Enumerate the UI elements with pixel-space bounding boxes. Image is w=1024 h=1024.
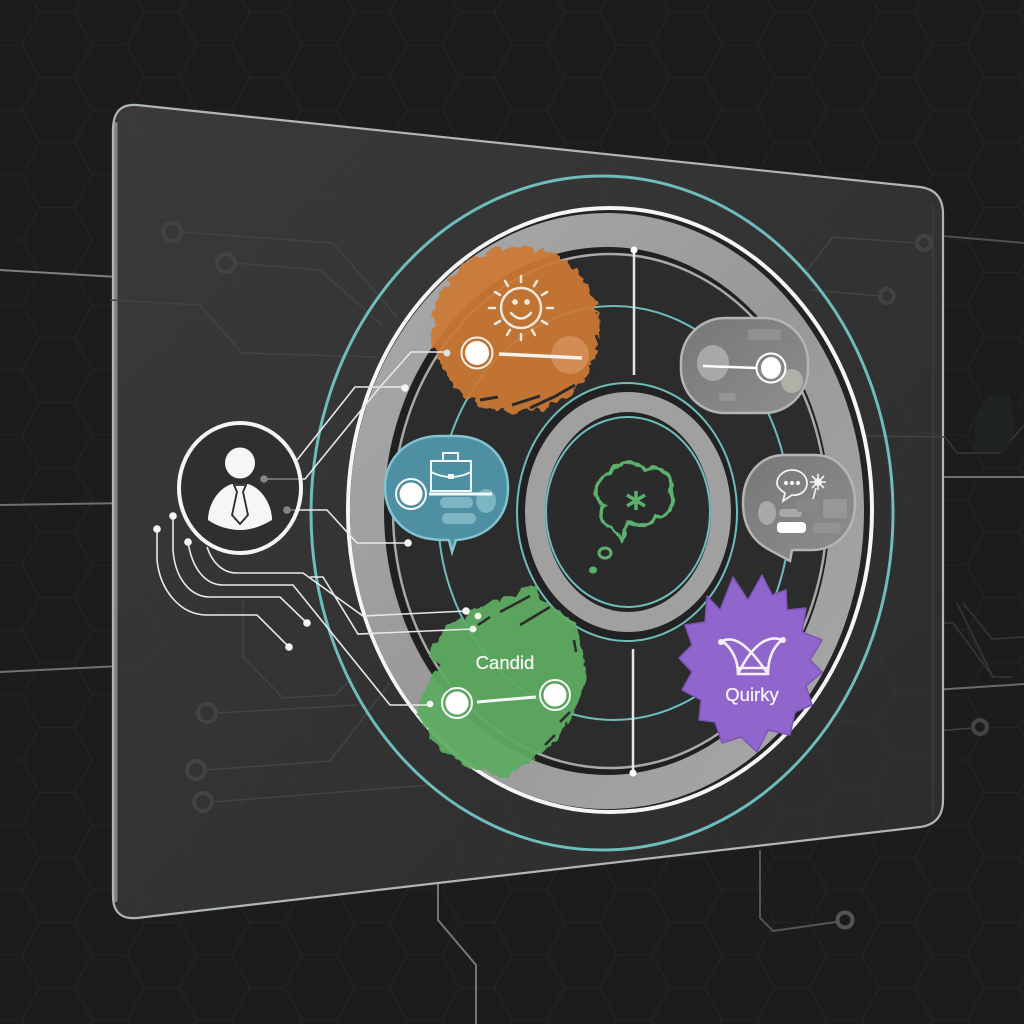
panel: grey chat bubble bbox=[743, 455, 855, 561]
green blob bbox=[417, 584, 585, 778]
panel: orange segment bbox=[432, 246, 600, 412]
bottom spoke bbox=[630, 649, 636, 776]
toggle slider bbox=[703, 354, 786, 382]
icon: jester hat bbox=[718, 637, 786, 674]
background circuit lines bbox=[0, 236, 1024, 1024]
teal middle ring bbox=[438, 306, 790, 720]
hub inner teal ring bbox=[546, 417, 710, 607]
icon: smiling sun bbox=[489, 276, 553, 340]
panel: green Candid segment bbox=[417, 584, 585, 778]
toggle slider bbox=[462, 338, 582, 368]
icon: briefcase bbox=[431, 453, 471, 491]
purple burst bbox=[679, 575, 822, 752]
icon: flower wand bbox=[810, 474, 826, 503]
inner disc bbox=[393, 254, 827, 768]
top spoke bbox=[630, 246, 638, 375]
label: Candid: Candid bbox=[476, 652, 534, 673]
connector lines bbox=[153, 350, 481, 707]
hub grey ring bbox=[535, 402, 721, 622]
outer teal ring bbox=[311, 176, 893, 850]
icon: person with tie bbox=[208, 448, 272, 530]
toggle slider bbox=[442, 680, 570, 718]
toggle slider bbox=[396, 479, 492, 509]
label: Quirky: Quirky bbox=[725, 684, 779, 705]
orange blob bbox=[432, 246, 600, 412]
glass panel bbox=[113, 105, 943, 918]
wheel disc and grey ring bbox=[367, 230, 847, 792]
main wheel bbox=[311, 176, 893, 850]
panel: grey pill card bbox=[681, 318, 808, 413]
persona avatar bbox=[179, 423, 301, 553]
panel: teal speech bubble bbox=[385, 436, 508, 552]
white outer ring bbox=[348, 208, 872, 812]
icon: chat dots bbox=[777, 470, 807, 501]
hub outer teal ring bbox=[517, 383, 737, 641]
icon: thought cloud bbox=[589, 463, 673, 574]
panel: purple Quirky segment bbox=[679, 575, 822, 752]
panel circuit traces bbox=[110, 223, 945, 811]
